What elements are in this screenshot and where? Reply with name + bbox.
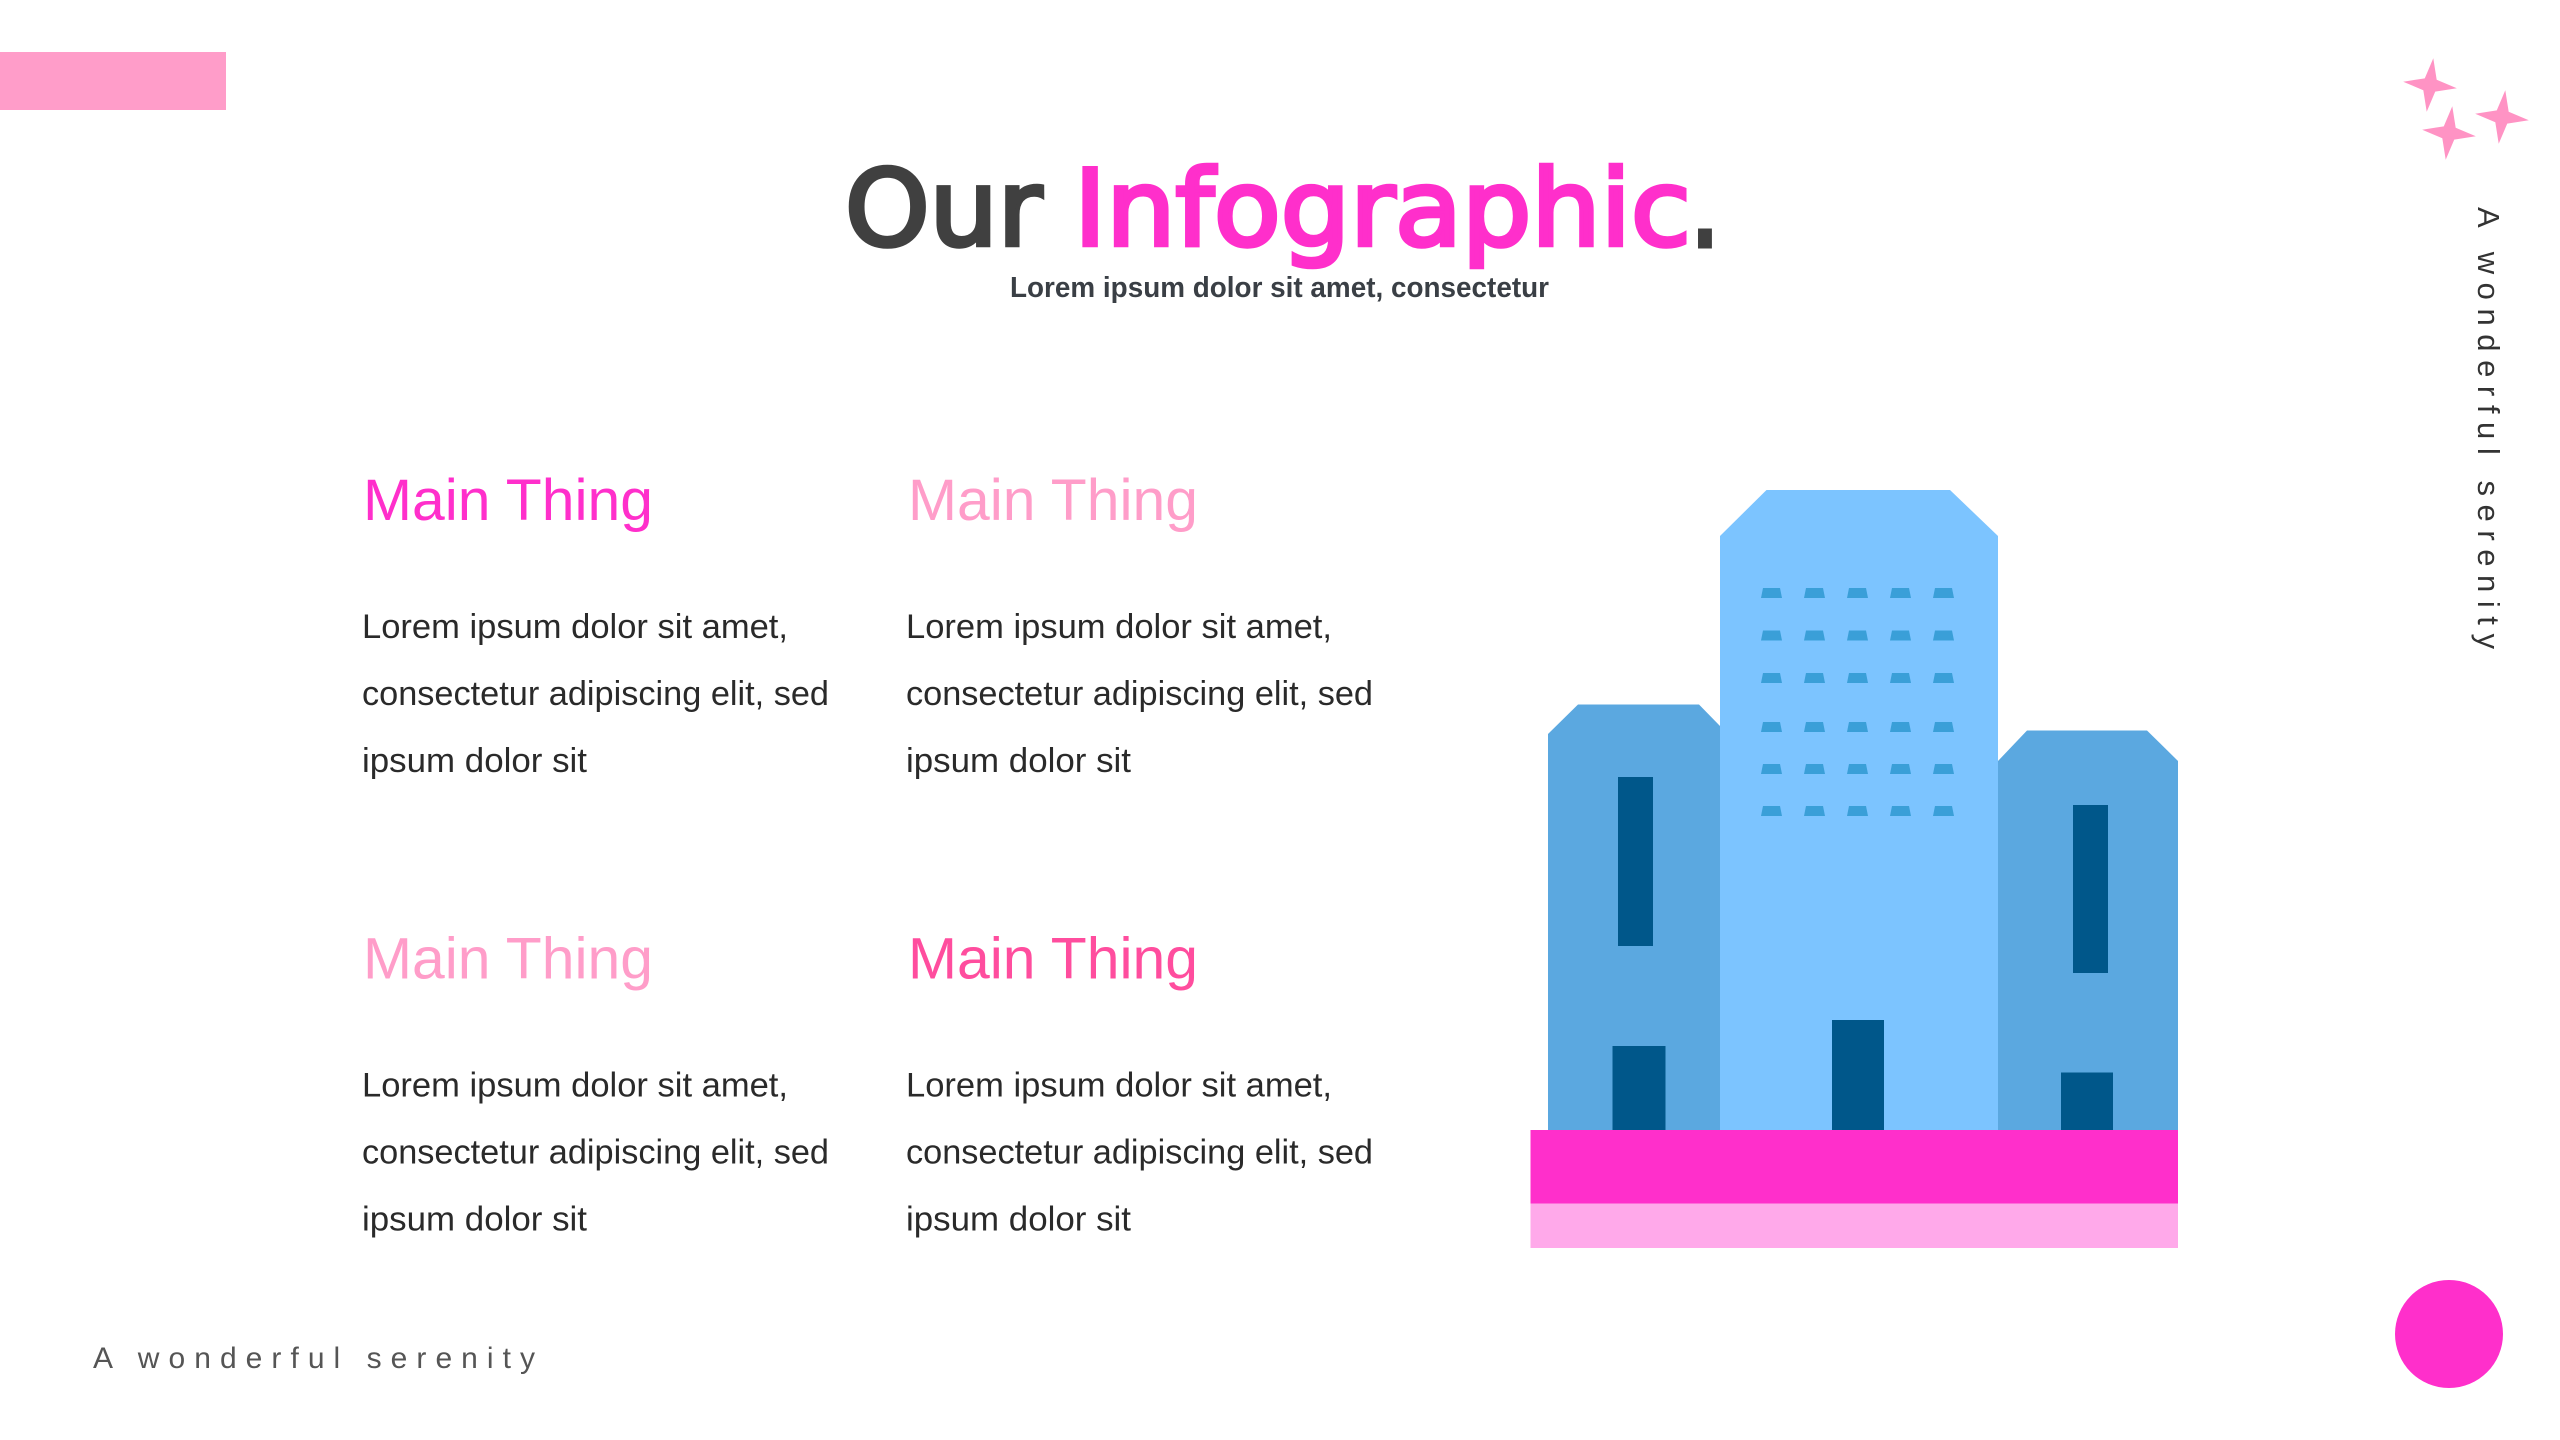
panel: item 4 bbox=[906, 926, 1373, 1238]
left building bbox=[1548, 704, 1720, 1131]
text block: item 1 bbox=[362, 608, 829, 780]
panel: item 1 bbox=[362, 468, 829, 780]
text block: item 1: Lorem ipsum dolor sit amet, bbox=[362, 608, 788, 646]
right building bbox=[1998, 730, 2178, 1131]
title bbox=[845, 148, 1718, 270]
heading: item 1: Main Thing bbox=[363, 468, 653, 533]
footer tagline: A wonderful serenity bbox=[93, 1342, 535, 1375]
tower windows bbox=[1761, 588, 1954, 816]
text block: item 4 bbox=[906, 1066, 1373, 1238]
ground band bbox=[1530, 1130, 2178, 1204]
text block: item 2 bbox=[906, 608, 1373, 780]
title: Infographic bbox=[1074, 148, 1691, 270]
title: Our bbox=[845, 148, 1043, 270]
subtitle: Lorem ipsum dolor sit amet, consectetur bbox=[1010, 272, 1549, 304]
text block: item 4: consectetur adipiscing elit, sed bbox=[906, 1134, 1373, 1172]
ground shadow band bbox=[1530, 1204, 2178, 1248]
heading: item 4: Main Thing bbox=[908, 926, 1198, 992]
heading: item 2: Main Thing bbox=[908, 468, 1198, 533]
panel: item 3 bbox=[362, 926, 829, 1238]
text block: item 1: consectetur adipiscing elit, sed bbox=[362, 675, 829, 713]
left building window bbox=[1618, 777, 1653, 946]
text block: item 4: ipsum dolor sit bbox=[906, 1200, 1132, 1238]
left building door bbox=[1612, 1046, 1666, 1131]
text block: item 1: ipsum dolor sit bbox=[362, 742, 588, 780]
heading: item 3: Main Thing bbox=[363, 926, 653, 992]
text block: item 2: Lorem ipsum dolor sit amet, bbox=[906, 608, 1332, 646]
text block: item 3 bbox=[362, 1066, 829, 1238]
right building window bbox=[2073, 805, 2108, 973]
title: . bbox=[1692, 148, 1718, 270]
text block: item 3: Lorem ipsum dolor sit amet, bbox=[362, 1066, 788, 1104]
panel: item 2 bbox=[906, 468, 1373, 780]
text block: item 3: ipsum dolor sit bbox=[362, 1200, 588, 1238]
text block: item 4: Lorem ipsum dolor sit amet, bbox=[906, 1066, 1332, 1104]
centre tower door bbox=[1832, 1020, 1884, 1131]
decorative circle bbox=[2395, 1280, 2503, 1388]
text block: item 3: consectetur adipiscing elit, sed bbox=[362, 1134, 829, 1172]
right building door bbox=[2061, 1072, 2113, 1131]
vertical tagline: A wonderful serenity bbox=[2471, 207, 2506, 650]
icon: sparkles bbox=[2400, 55, 2532, 163]
icon: city buildings bbox=[1530, 490, 2178, 1248]
text block: item 2: ipsum dolor sit bbox=[906, 742, 1132, 780]
top-left accent bar bbox=[0, 52, 226, 110]
text block: item 2: consectetur adipiscing elit, sed bbox=[906, 675, 1373, 713]
centre tower bbox=[1720, 490, 1998, 1131]
